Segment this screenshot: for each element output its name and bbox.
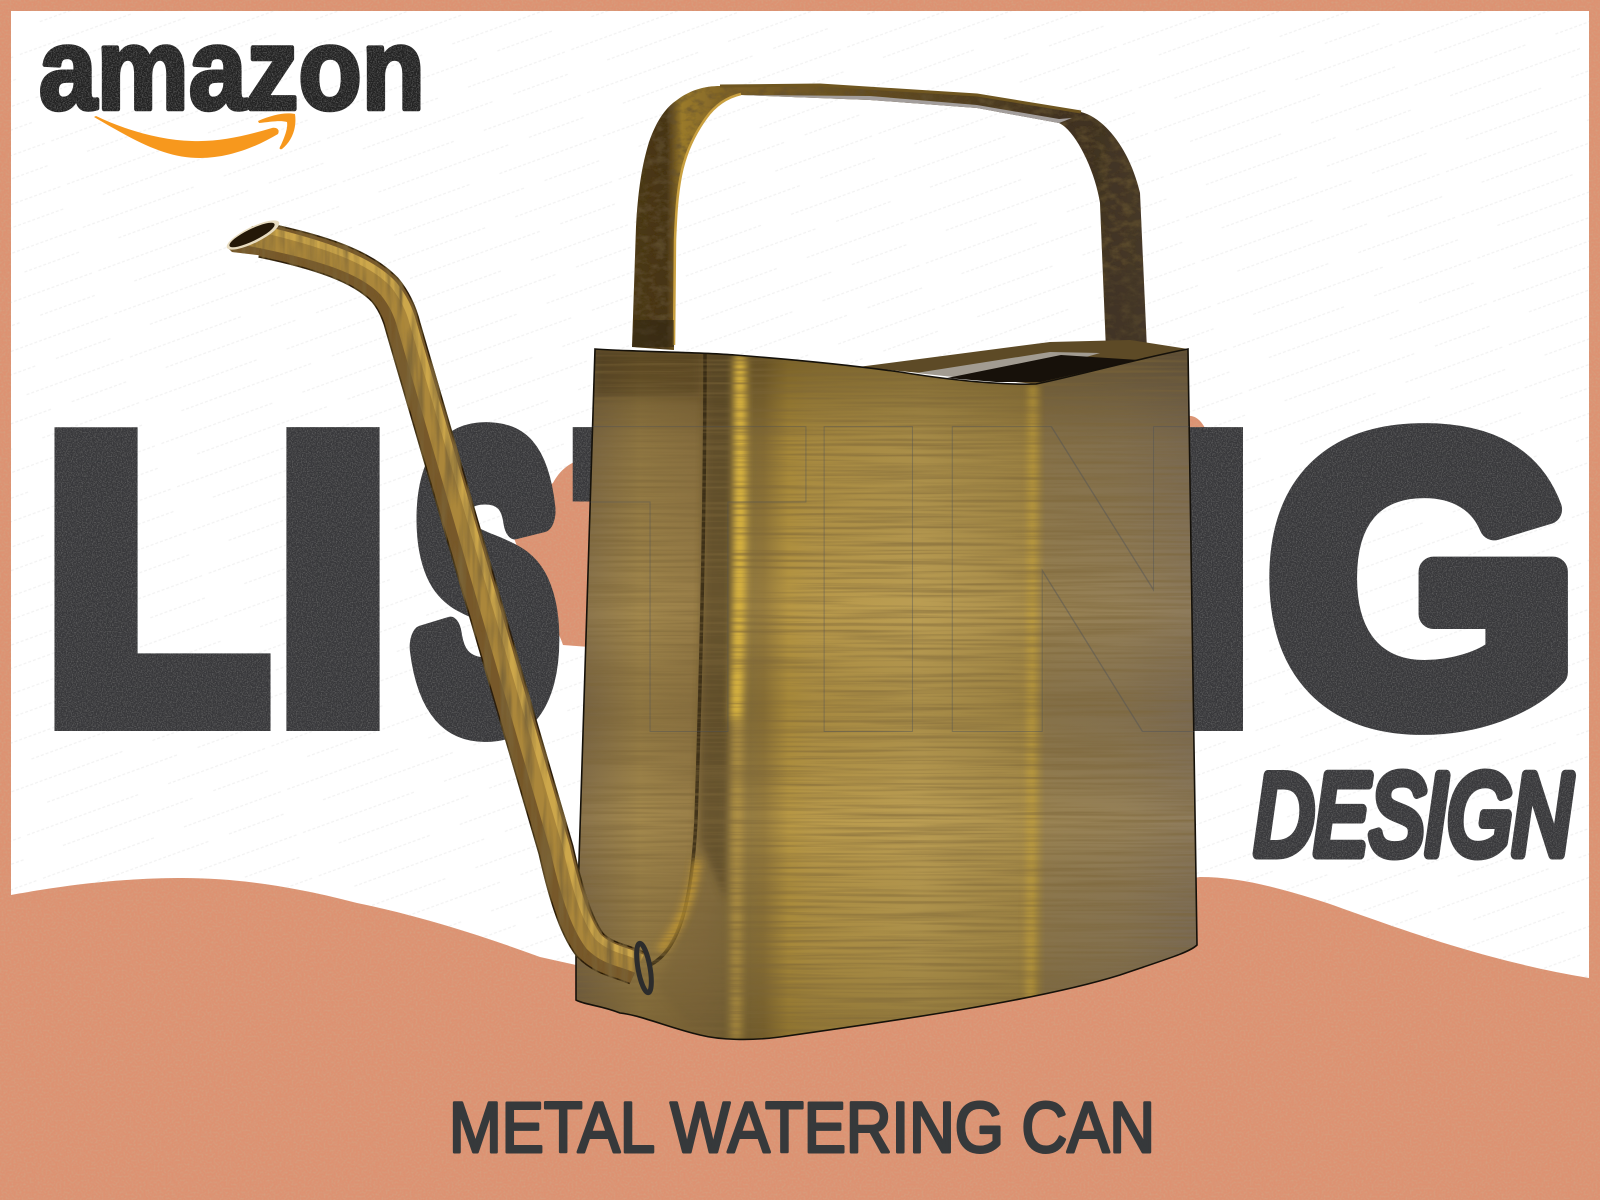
amazon logo xyxy=(39,4,425,158)
heading: LISTING: I xyxy=(274,357,392,801)
ring joint xyxy=(634,942,654,994)
bottom title: METAL WATERING CAN xyxy=(449,1089,1155,1168)
heading: LISTING: S xyxy=(415,362,556,800)
watering can xyxy=(223,85,1256,1050)
heading: LISTING: T xyxy=(582,357,796,801)
amazon wordmark: amazon xyxy=(39,4,425,134)
orange blob behind letters xyxy=(505,416,1210,647)
amazon smile arrow xyxy=(94,113,295,158)
heading: LISTING: L xyxy=(46,360,266,798)
ghost outlines of TIN letters on can: T xyxy=(582,357,796,801)
ghost outlines of TIN letters on can: N xyxy=(940,357,1256,801)
ghost outlines of TIN letters on can xyxy=(590,426,1194,732)
spout tip cone xyxy=(228,221,278,256)
seam fold xyxy=(670,812,729,972)
spout opening xyxy=(223,215,283,255)
can body xyxy=(560,340,1210,1050)
heading: LISTING xyxy=(46,357,1578,801)
spout xyxy=(228,221,642,968)
ghost outlines of TIN letters on can: I xyxy=(813,357,924,801)
heading: LISTING: G xyxy=(1268,357,1578,801)
heading: LISTING: N xyxy=(940,357,1256,801)
can opening xyxy=(858,340,1188,384)
heading: LISTING: I xyxy=(813,357,924,801)
handle xyxy=(632,85,1147,350)
